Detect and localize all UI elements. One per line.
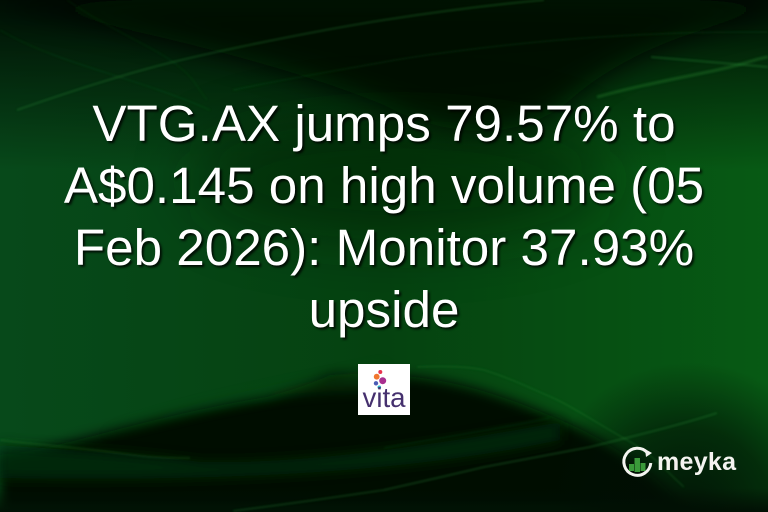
icon: vita company logo: vita [362,382,406,413]
brand: meyka logo [622,446,737,477]
icon: meyka ring with bars [624,448,652,475]
title [64,95,705,340]
wordmark: meyka [657,448,737,476]
title: upside [309,281,459,338]
title: A$0.145 on high volume (05 [64,157,704,214]
icon: vita company logo [358,364,410,415]
title: Feb 2026): Monitor 37.93% [74,219,694,276]
title: VTG.AX jumps 79.57% to [92,95,676,152]
